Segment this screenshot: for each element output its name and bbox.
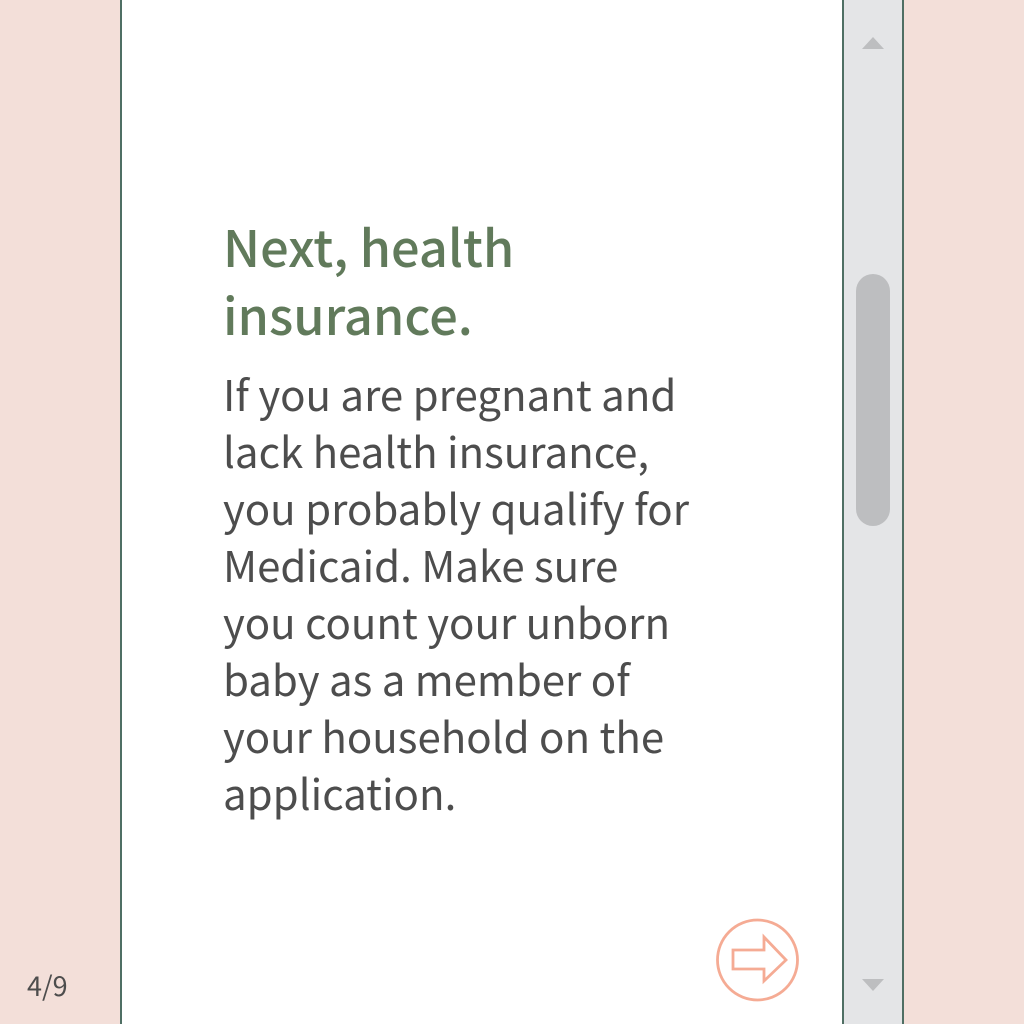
icon: scroll down triangle	[862, 979, 884, 991]
body text: baby as a member of	[223, 648, 630, 708]
page number: 4/9	[27, 965, 68, 1004]
panel: scrollbar track	[842, 0, 904, 1024]
body text	[223, 362, 690, 822]
panel: white content card	[120, 0, 844, 1024]
body text: If you are pregnant and	[223, 362, 676, 424]
heading	[223, 208, 514, 350]
heading: Next, health	[223, 208, 514, 282]
icon: next arrow button	[716, 918, 799, 1002]
body text: your household on the	[223, 704, 664, 766]
body text: lack health insurance,	[223, 420, 649, 480]
body text: you probably qualify for	[223, 476, 689, 538]
body text: you count your unborn	[223, 590, 670, 652]
body text: application.	[223, 762, 456, 822]
icon: scroll up triangle	[862, 37, 884, 49]
heading: insurance.	[223, 276, 473, 350]
body text: Medicaid. Make sure	[223, 534, 618, 594]
scrollbar thumb	[856, 274, 890, 526]
